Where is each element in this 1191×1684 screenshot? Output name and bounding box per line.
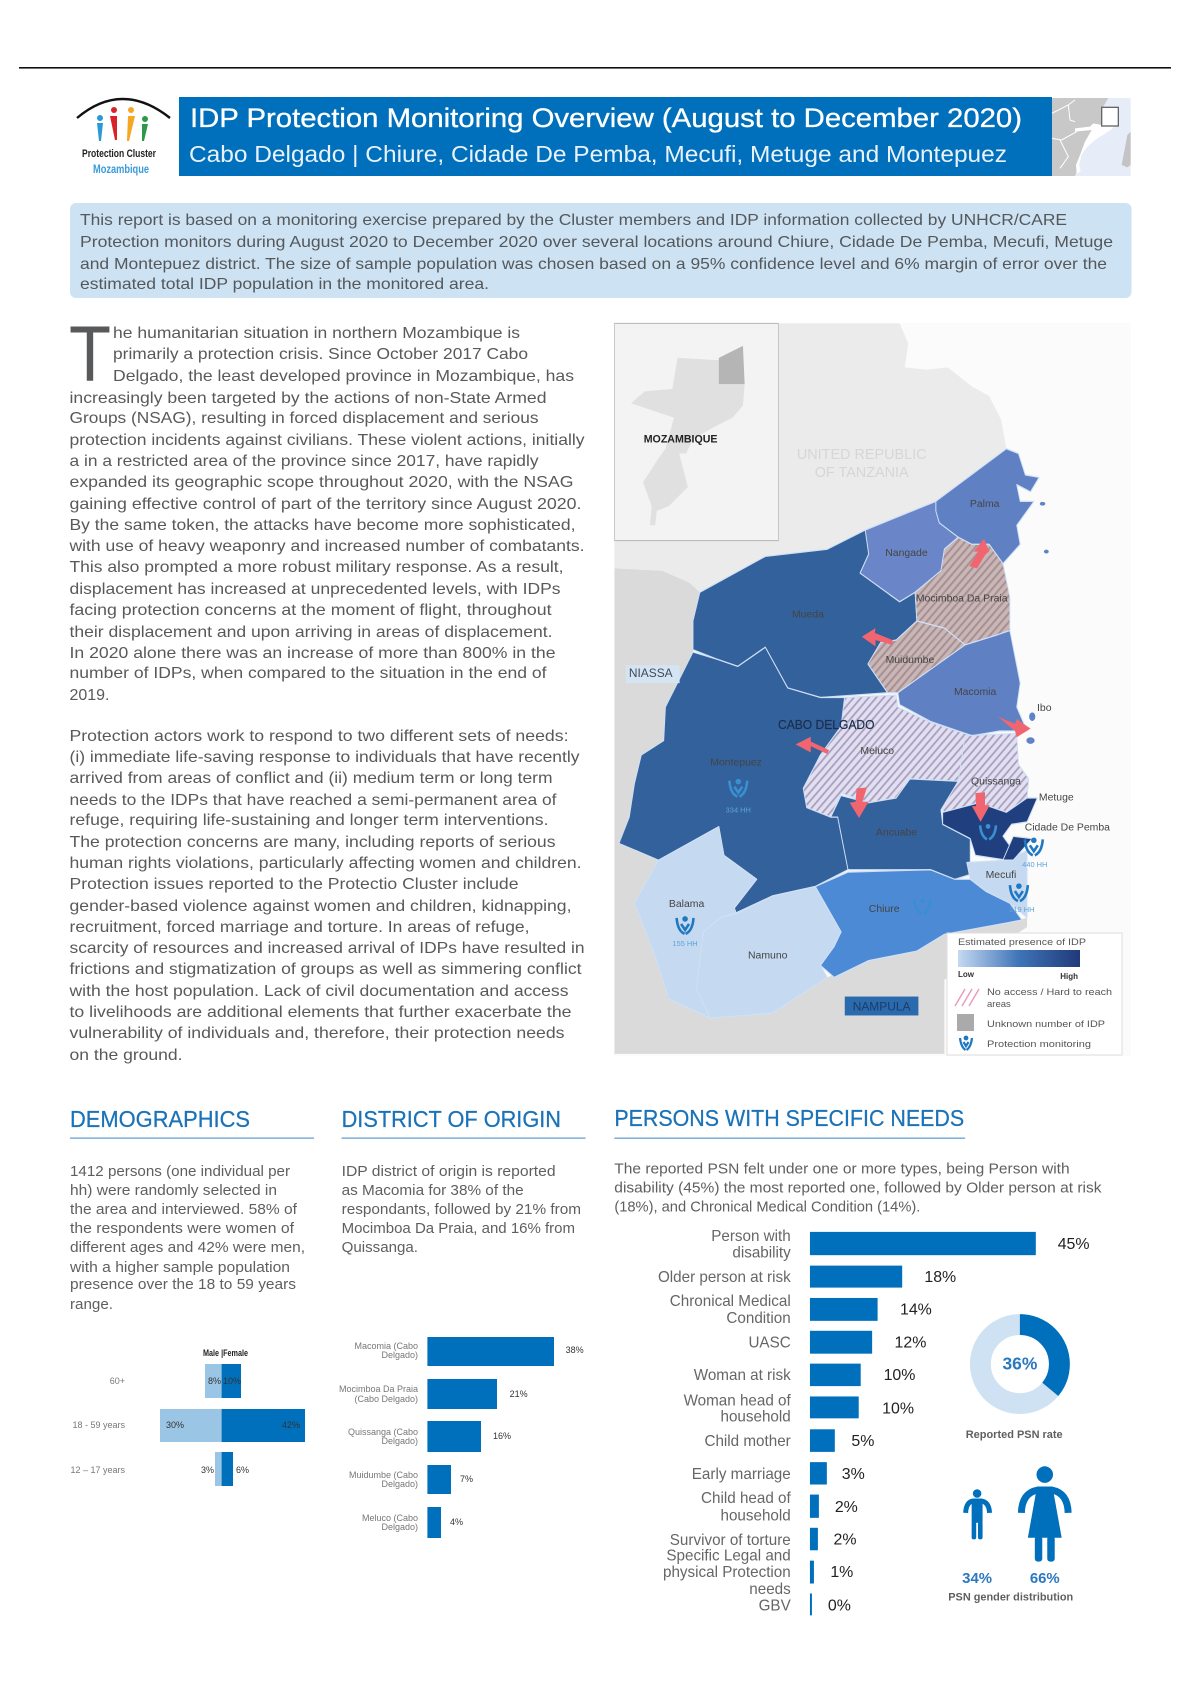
panel: district of origin: [339, 1106, 586, 1538]
district bar chart: Mocimboa Da Praia: [339, 1384, 418, 1394]
icon: female: [1021, 1466, 1068, 1562]
map labels: Mecufi: [986, 870, 1016, 881]
population pyramid chart: Male |Female: [203, 1348, 248, 1358]
intro text box: This report is based on a monitoring exercise prepared by the Cluster members and IDP information collected by UNHCR/CARE: [80, 212, 1067, 229]
PSN bar chart: 1%: [830, 1564, 853, 1581]
body text paragraph 2: vulnerability of individuals and, therefore, their protection needs: [70, 1025, 564, 1042]
district bar chart: 7%: [460, 1474, 473, 1484]
body text paragraph 1: a in a restricted area of the province since 2017, have rapidly: [70, 453, 538, 470]
Niassa and Nampula land: [614, 568, 1027, 1054]
Chiure: [815, 870, 1022, 977]
Montepuez: [619, 647, 848, 913]
PSN bar chart: 2%: [834, 1532, 857, 1549]
map labels: Namuno: [748, 951, 788, 962]
subtitle: Cabo Delgado | Chiure, Cidade De Pemba, Mecufi, Metuge and Montepuez: [189, 141, 1007, 167]
drop cap: T: [69, 309, 111, 398]
demographics text: the area and interviewed. 58% of: [70, 1201, 298, 1218]
gender distribution icons: PSN gender distribution: [948, 1591, 1073, 1603]
map labels: Palma: [970, 499, 1000, 510]
gender distribution icons: 34%: [962, 1570, 992, 1587]
map labels: Ancuabe: [876, 827, 917, 838]
PSN text: disability (45%) the most reported one, followed by Older person at risk: [614, 1179, 1102, 1196]
body text paragraph 2: Protection issues reported to the Protectio Cluster include: [70, 876, 519, 893]
donut chart: reported PSN rate: Reported PSN rate: [966, 1429, 1063, 1441]
map labels: Meluco: [860, 746, 894, 757]
map legend: No access / Hard to reach: [987, 987, 1112, 998]
map labels: UNITED REPUBLIC: [797, 447, 927, 463]
PSN bar chart: 14%: [900, 1301, 932, 1318]
population pyramid chart: 8%: [208, 1376, 221, 1386]
body text paragraph 2: The protection concerns are many, including reports of serious: [70, 834, 556, 851]
intro text box: [70, 203, 1132, 298]
Quissanga: [941, 733, 1029, 812]
PSN bar chart: Chronical Medical: [670, 1293, 791, 1310]
district bar chart: 21%: [510, 1389, 528, 1399]
district bar chart: (Cabo Delgado): [354, 1394, 418, 1404]
PSN bar chart: household: [720, 1507, 791, 1524]
Mecufi: [967, 851, 1027, 918]
PSN text: (18%), and Chronical Medical Condition (14%).: [614, 1198, 920, 1215]
demographics text: [69, 1163, 305, 1313]
Palma: [936, 449, 1039, 564]
PSN bar chart: 10%: [884, 1367, 915, 1384]
map labels: MOZAMBIQUE: [644, 433, 717, 445]
map labels: Chiure: [869, 904, 900, 915]
population pyramid chart: 6%: [236, 1465, 249, 1475]
Muidumbe: [868, 621, 965, 693]
PSN bar chart: Survivor of torture: [670, 1532, 791, 1549]
body text paragraph 1: Groups (NSAG), resulting in forced displacement and serious: [70, 410, 538, 427]
body text paragraph 2: to livelihoods are additional elements that further exacerbate the: [70, 1004, 572, 1021]
demographics text: different ages and 42% were men,: [70, 1239, 305, 1256]
map legend: Protection monitoring: [987, 1039, 1091, 1050]
map labels: NIASSA: [629, 666, 673, 680]
Cidade De Pemba: [1003, 836, 1032, 860]
district text: Mocimboa Da Praia, and 16% from: [342, 1220, 575, 1237]
PSN bar chart: 10%: [882, 1400, 914, 1417]
demographics text: hh) were randomly selected in: [70, 1182, 277, 1199]
body text paragraph 1: increasingly been targeted by the actions of non-State Armed: [70, 390, 546, 407]
map legend: Low: [958, 970, 975, 979]
PSN text: The reported PSN felt under one or more types, being Person with: [614, 1161, 1070, 1178]
PSN bar chart: household: [720, 1408, 791, 1425]
district bar chart: 16%: [493, 1431, 511, 1441]
PSN bar chart: 3%: [842, 1466, 865, 1483]
logo: Protection Cluster Mozambique: Protection Cluster: [82, 148, 157, 160]
demographics text: 1412 persons (one individual per: [70, 1163, 290, 1180]
population pyramid chart: 60+: [110, 1376, 125, 1386]
PSN bar chart: 18%: [924, 1269, 956, 1286]
body text paragraph 2: human rights violations, particularly affecting women and children.: [70, 855, 582, 872]
heading: DEMOGRAPHICS: [70, 1106, 250, 1132]
map labels: Cidade De Pemba: [1025, 822, 1110, 833]
map labels: [626, 433, 1110, 1015]
PSN bar chart: 0%: [828, 1597, 851, 1614]
banner thumbnail map: [1052, 98, 1131, 176]
map legend: Estimated presence of IDP: [958, 937, 1086, 948]
body text paragraph 1: he humanitarian situation in northern Mozambique is: [113, 325, 520, 342]
district bar chart: Delgado): [381, 1522, 418, 1532]
PSN bar chart: Child mother: [704, 1433, 791, 1450]
protection monitoring icons: [677, 779, 1043, 934]
Balama: [634, 827, 757, 1018]
Nangade: [860, 501, 958, 602]
district bar chart: Delgado): [381, 1436, 418, 1446]
district text: respondants, followed by 21% from: [342, 1201, 581, 1218]
intro text box: estimated total IDP population in the monitored area.: [80, 276, 489, 293]
PSN bar chart: 45%: [1058, 1236, 1090, 1253]
map labels: CABO DELGADO: [778, 718, 875, 732]
map labels: Ibo: [1037, 703, 1052, 714]
PSN bar chart: UASC: [748, 1335, 791, 1352]
body text paragraph 1: primarily a protection crisis. Since October 2017 Cabo: [113, 346, 528, 363]
islands: [1026, 502, 1049, 744]
district text: as Macomia for 38% of the: [342, 1182, 524, 1199]
PSN bar chart: 5%: [851, 1433, 874, 1450]
demographics text: range.: [70, 1296, 113, 1313]
PSN text: [614, 1161, 1102, 1215]
body text paragraph 2: on the ground.: [70, 1047, 182, 1064]
body text paragraph 1: their displacement and upon arriving in areas of displacement.: [70, 624, 552, 641]
map labels: 334 HH: [726, 805, 751, 814]
map labels: Mocimboa Da Praia: [916, 594, 1008, 605]
map labels: Mueda: [792, 609, 824, 620]
icon: male: [966, 1489, 990, 1539]
body text paragraph 1: By the same token, the attacks have become more sophisticated,: [70, 517, 576, 534]
PSN bar chart: GBV: [759, 1597, 792, 1614]
population pyramid chart: 10%: [223, 1376, 241, 1386]
demographics text: the respondents were women of: [70, 1220, 295, 1237]
body text paragraph 2: [68, 728, 584, 1064]
body text paragraph 1: displacement has increased at unprecedented levels, with IDPs: [70, 581, 560, 598]
logo: Protection Cluster Mozambique: [77, 99, 170, 176]
map legend: Unknown number of IDP: [987, 1019, 1105, 1030]
body text paragraph 1: facing protection concerns at the moment of flight, throughout: [70, 602, 552, 619]
PSN bar chart: Older person at risk: [658, 1269, 791, 1286]
panel: demographics: [69, 1106, 314, 1486]
Mocimboa Da Praia: [915, 537, 1010, 645]
gender distribution icons: 66%: [1030, 1570, 1060, 1587]
district bar chart: Quissanga (Cabo: [348, 1427, 418, 1437]
map labels: Macomia: [954, 687, 996, 698]
map labels: Muidumbe: [886, 655, 935, 666]
demographics text: presence over the 18 to 59 years: [70, 1276, 296, 1293]
population pyramid chart: 42%: [282, 1420, 300, 1430]
map labels: Nangade: [885, 548, 928, 559]
body text paragraph 1: gaining effective control of part of the territory since August 2020.: [70, 496, 582, 513]
body text paragraph 1: with use of heavy weaponry and increased number of combatants.: [68, 538, 585, 555]
population pyramid chart: 18 - 59 years: [72, 1420, 125, 1430]
Metuge: [943, 798, 1037, 860]
population pyramid chart: [70, 1348, 305, 1486]
PSN bar chart: disability: [732, 1245, 791, 1262]
heading: DISTRICT OF ORIGIN: [342, 1106, 561, 1132]
population pyramid chart: 12 – 17 years: [70, 1465, 125, 1475]
district bar chart: Delgado): [381, 1350, 418, 1360]
body text paragraph 1: expanded its geographic scope throughout 2020, with the NSAG: [70, 474, 574, 491]
body text paragraph 1: protection incidents against civilians. These violent actions, initially: [70, 432, 584, 449]
map labels: NAMPULA: [853, 999, 910, 1013]
body text paragraph 2: frictions and stigmatization of groups as well as simmering conflict: [70, 961, 582, 978]
map labels: OF TANZANIA: [815, 465, 909, 481]
displacement arrows: [796, 539, 1030, 822]
title: IDP Protection Monitoring Overview (August to December 2020): [190, 103, 1022, 133]
body text paragraph 2: scarcity of resources and increased arrival of IDPs have resulted in: [70, 940, 584, 957]
map labels: Montepuez: [710, 758, 762, 769]
gender distribution icons: [948, 1466, 1073, 1603]
demographics text: with a higher sample population: [69, 1259, 290, 1276]
body text paragraph 2: Protection actors work to respond to two different sets of needs:: [70, 728, 568, 745]
body text paragraph 2: arrived from areas of conflict and (ii) medium term or long term: [70, 770, 552, 787]
PSN bar chart: 12%: [895, 1335, 926, 1352]
body text paragraph 2: recruitment, forced marriage and torture. In areas of refuge,: [70, 919, 530, 936]
PSN bar chart: Condition: [726, 1310, 791, 1327]
body text paragraph 1: This also prompted a more robust military response. As a result,: [70, 559, 564, 576]
PSN bar chart: [658, 1228, 1090, 1615]
district bar chart: 4%: [450, 1517, 463, 1527]
Ancuabe: [831, 779, 970, 879]
donut chart: reported PSN rate: 36%: [1002, 1354, 1038, 1374]
district text: [342, 1163, 581, 1256]
body text paragraph 2: needs to the IDPs that have reached a semi-permanent area of: [70, 792, 557, 809]
Meluco: [803, 695, 972, 817]
body text paragraph 2: (i) immediate life-saving response to individuals that have recently: [70, 749, 580, 766]
body text paragraph 1: [68, 309, 585, 704]
district bar chart: 38%: [566, 1345, 584, 1355]
population pyramid chart: 30%: [166, 1420, 184, 1430]
body text paragraph 1: number of IDPs, when compared to the situation in the end of: [70, 665, 547, 682]
district bar chart: Muidumbe (Cabo: [349, 1470, 418, 1480]
map labels: 155 HH: [672, 939, 698, 948]
district text: Quissanga.: [342, 1239, 418, 1256]
PSN bar chart: needs: [749, 1581, 791, 1598]
body text paragraph 1: 2019.: [70, 687, 110, 704]
PSN bar chart: Child head of: [701, 1490, 792, 1507]
district text: IDP district of origin is reported: [342, 1163, 556, 1180]
district bar chart: Macomia (Cabo: [354, 1341, 418, 1351]
body text paragraph 1: In 2020 alone there was an increase of more than 800% in the: [70, 645, 556, 662]
intro text box: and Montepuez district. The size of sample population was chosen based on a 95% confidence level and 6% margin of error over the: [80, 256, 1107, 273]
map labels: Quissanga: [971, 777, 1021, 788]
donut chart: reported PSN rate: [966, 1325, 1063, 1441]
PSN bar chart: Person with: [711, 1228, 791, 1245]
map labels: 219 HH: [1009, 905, 1035, 914]
district bar chart: Meluco (Cabo: [362, 1513, 418, 1523]
district bar chart: [339, 1337, 584, 1538]
population pyramid chart: 3%: [201, 1465, 214, 1475]
body text paragraph 2: with the host population. Lack of civil documentation and access: [68, 983, 568, 1000]
map labels: Metuge: [1039, 793, 1074, 804]
Macomia: [898, 631, 1027, 736]
inset map: [614, 323, 778, 541]
body text paragraph 2: gender-based violence against women and children, kidnapping,: [70, 898, 572, 915]
logo: Protection Cluster Mozambique: Mozambique: [93, 162, 149, 176]
PSN bar chart: physical Protection: [663, 1564, 791, 1581]
PSN bar chart: Woman at risk: [694, 1367, 791, 1384]
body text paragraph 1: Delgado, the least developed province in Mozambique, has: [113, 368, 574, 385]
map legend: areas: [987, 999, 1011, 1010]
PSN bar chart: Woman head of: [684, 1392, 792, 1409]
heading: PERSONS WITH SPECIFIC NEEDS: [614, 1105, 964, 1131]
Namuno: [696, 886, 841, 1018]
title banner: [179, 97, 1052, 176]
map labels: 440 HH: [1022, 860, 1047, 869]
body text paragraph 2: refuge, requiring life-sustaining and longer term interventions.: [70, 812, 548, 829]
map legend: [947, 933, 1122, 1055]
PSN bar chart: Specific Legal and: [666, 1547, 791, 1564]
district bar chart: Delgado): [381, 1479, 418, 1489]
Tanzania land: [614, 323, 1006, 592]
intro text box: Protection monitors during August 2020 to December 2020 over several locations around Chiure, Cidade De Pemba, Mecufi, Metuge: [80, 234, 1113, 251]
PSN bar chart: Early marriage: [692, 1466, 791, 1483]
Mueda: [693, 530, 917, 698]
map labels: Balama: [669, 899, 704, 910]
PSN bar chart: 2%: [835, 1499, 858, 1516]
map legend: High: [1060, 972, 1078, 981]
map: Cabo Delgado estimated IDP presence: [69, 323, 1131, 1615]
panel: persons with specific needs: [614, 1105, 1102, 1615]
